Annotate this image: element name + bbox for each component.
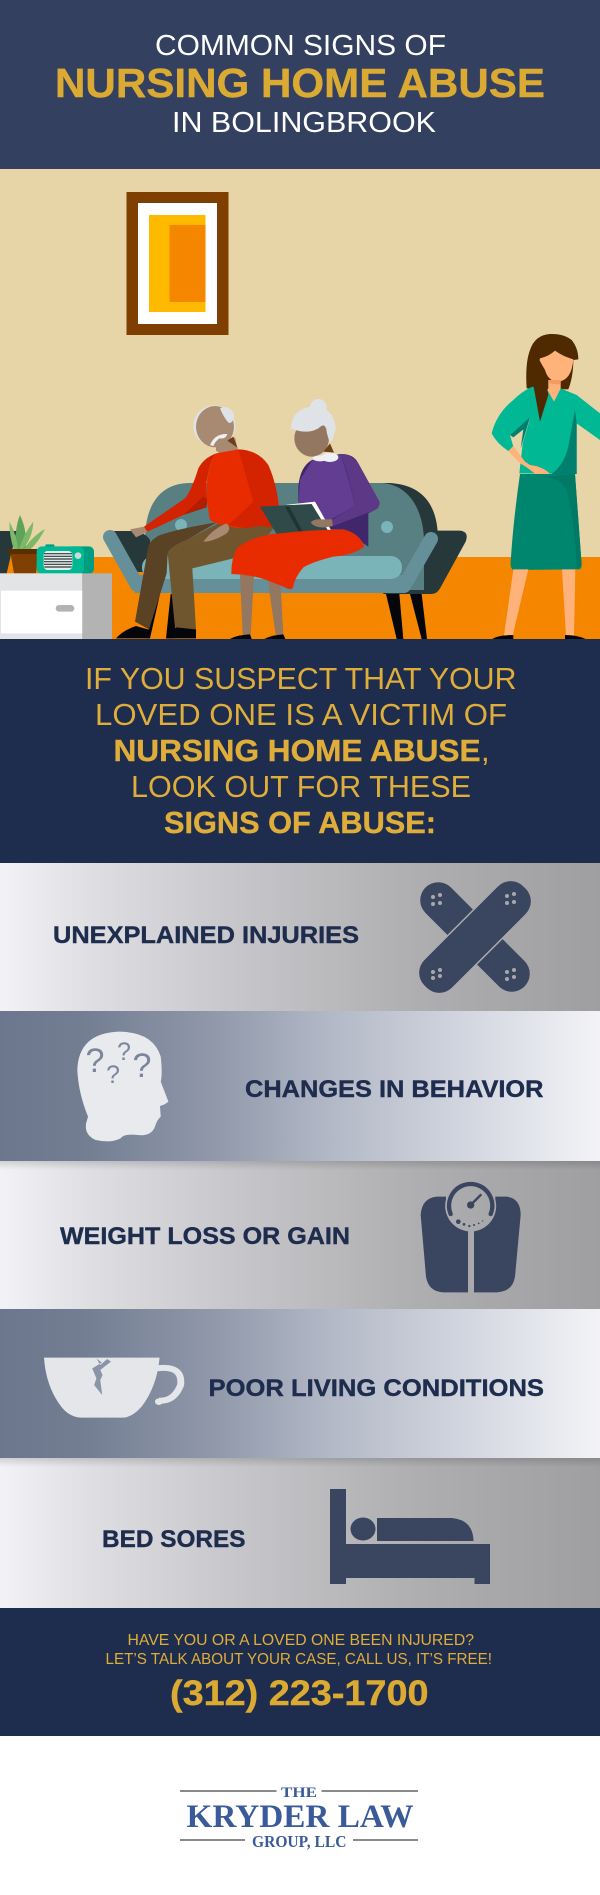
sign band: poor living conditions	[0, 1309, 600, 1458]
intro line 2: LOVED ONE IS A VICTIM OF	[95, 697, 507, 732]
sign band: bed sores	[0, 1458, 600, 1608]
logo: the kryder law group: KRYDER LAW	[186, 1799, 414, 1835]
title line: in bolingbrook: IN BOLINGBROOK	[172, 107, 437, 139]
icon: bathroom scale	[421, 1184, 521, 1292]
framed picture	[126, 192, 228, 335]
sign band: changes in behavior	[0, 1011, 600, 1161]
call to action line 1: HAVE YOU OR A LOVED ONE BEEN INJURED?	[128, 1632, 474, 1649]
call to action panel	[0, 1608, 600, 1736]
call to action line 2: LET’S TALK ABOUT YOUR CASE, CALL US, IT’S FREE!	[106, 1651, 492, 1668]
label: CHANGES IN BEHAVIOR	[245, 1076, 544, 1103]
label: UNEXPLAINED INJURIES	[53, 922, 359, 949]
logo: the kryder law group: GROUP, LLC	[252, 1832, 346, 1851]
icon: head with question marks: ?	[106, 1061, 120, 1089]
icon: person in bed	[330, 1489, 490, 1584]
icon: head with question marks	[77, 1032, 168, 1141]
icon: head with question marks: ?	[133, 1047, 151, 1085]
sofa	[110, 483, 467, 639]
label: WEIGHT LOSS OR GAIN	[60, 1223, 350, 1250]
icon: crossed bandages	[412, 874, 538, 1000]
title line: common signs of: COMMON SIGNS OF	[155, 30, 446, 62]
intro line 1: IF YOU SUSPECT THAT YOUR	[85, 661, 516, 696]
sign band: weight loss or gain	[0, 1161, 600, 1309]
illustration: living room scene	[0, 169, 600, 639]
label: POOR LIVING CONDITIONS	[208, 1375, 544, 1402]
logo: the kryder law group: THE	[281, 1785, 317, 1801]
man in red sweater	[116, 405, 283, 638]
logo: the kryder law group	[180, 1785, 418, 1851]
intro comma: ,	[481, 733, 490, 768]
icon: head with question marks: ?	[86, 1042, 104, 1080]
title line: nursing home abuse: NURSING HOME ABUSE	[55, 60, 545, 106]
phone number: (312) 223-1700	[170, 1674, 428, 1713]
side table with plant and radio	[0, 515, 112, 639]
nurse in green uniform	[492, 334, 600, 639]
woman in purple sweater with book	[230, 399, 379, 639]
intro line 4: LOOK OUT FOR THESE	[131, 769, 471, 804]
label: BED SORES	[102, 1526, 246, 1553]
intro line 5: SIGNS OF ABUSE:	[164, 805, 436, 840]
icon: head with question marks: ?	[117, 1038, 131, 1066]
icon: cracked cup	[44, 1358, 181, 1418]
header panel	[0, 0, 600, 169]
intro line 3: NURSING HOME ABUSE	[114, 733, 481, 768]
sign band: unexplained injuries	[0, 863, 600, 1011]
intro panel	[0, 639, 600, 863]
